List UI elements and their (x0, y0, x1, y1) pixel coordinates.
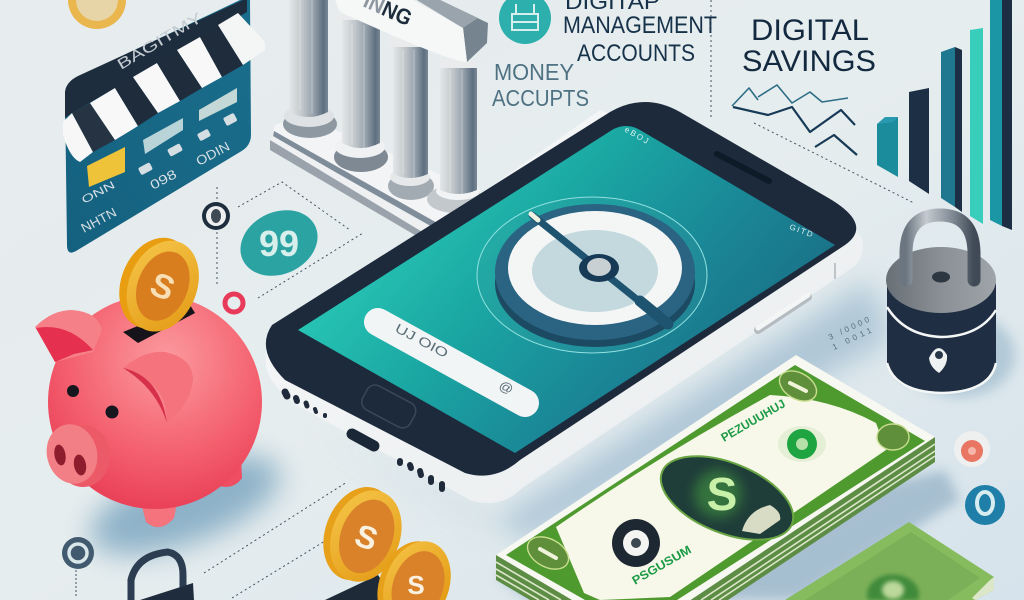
pig tail ring (225, 294, 243, 312)
column 2 (334, 8, 388, 172)
screen pill field: @ (497, 377, 516, 397)
pig snout (40, 419, 110, 489)
phone face (266, 102, 856, 476)
bill portrait oval: S (707, 468, 737, 520)
padlock top (886, 247, 996, 313)
padlock keyhole (929, 348, 947, 373)
coin: lower right: S (407, 570, 425, 600)
phone screen (298, 126, 835, 453)
card details: ONN (80, 179, 117, 207)
icon: coral dot (954, 431, 990, 467)
phone (266, 102, 863, 503)
badge: ring marker (202, 202, 230, 230)
screen status labels: eBOJ (623, 125, 650, 146)
bill serial texts: PSGUSUM (630, 542, 694, 588)
icon: management circle (499, 0, 551, 44)
card awning stripes (63, 13, 265, 162)
padlock body (887, 248, 996, 393)
padlock shackle (906, 215, 974, 280)
bill serial texts: PEZUUUHUJ (718, 396, 788, 445)
badge: 99: 99 (259, 223, 299, 264)
line chart (732, 85, 857, 155)
heading: digital management accounts: MANAGEMENT (563, 12, 717, 39)
pig left ear (35, 310, 102, 362)
bill serial texts (630, 396, 788, 588)
coin entering slot: S (145, 265, 180, 309)
bar chart (877, 0, 1012, 230)
card details (78, 88, 238, 236)
pig body (48, 295, 262, 509)
pig right ear (123, 352, 193, 423)
heading: digital savings: SAVINGS (742, 45, 876, 78)
phone home button (359, 382, 419, 431)
coin slot (123, 305, 195, 343)
pig shadow (78, 435, 292, 575)
pig legs (139, 458, 242, 527)
bill shadow (496, 470, 960, 600)
card dark band (65, 0, 247, 118)
screen status labels: GITD (788, 222, 814, 239)
dial widget (477, 197, 707, 353)
heading: money accupts: MONEY (494, 59, 574, 85)
small notes near padlock: 3 /0000 (827, 315, 871, 342)
small notes near padlock: 1 0011 (831, 326, 873, 352)
coin: lower right (377, 541, 451, 600)
bill green seal (778, 426, 826, 462)
coin: lower left: S (350, 517, 383, 558)
bar 1 (877, 117, 898, 177)
lower padlock (131, 552, 194, 600)
piggy bank (35, 227, 292, 575)
card details: 098 (147, 166, 179, 193)
card title: BAGITMY (114, 9, 205, 73)
phone earpiece (717, 154, 769, 181)
screen pill field (378, 320, 525, 403)
heading: digital savings: DIGITAL (751, 14, 869, 47)
padlock bands (887, 307, 996, 393)
bank roof (335, 0, 488, 62)
coin: lower left (311, 477, 414, 593)
stack edges (496, 437, 935, 600)
bar 2 (909, 88, 929, 194)
phone side (266, 110, 863, 503)
small notes near padlock (827, 315, 873, 352)
screen pill field: UJ OIO (393, 320, 451, 361)
column 4 (427, 57, 483, 213)
second bill (785, 522, 994, 600)
column 1 (283, 0, 337, 138)
bar 3 (941, 47, 962, 212)
icon: top coin (68, 0, 126, 29)
speaker dots (285, 392, 442, 489)
badge: small ring (62, 537, 94, 598)
heading: money accupts: ACCUPTS (492, 85, 589, 111)
dollar bill stack (496, 355, 960, 600)
bar 5 (990, 0, 1012, 230)
coin entering slot (106, 227, 212, 342)
pig eyes (67, 385, 118, 418)
badge: 99 (230, 198, 328, 288)
bank plinth (270, 115, 500, 238)
shadow under phone (300, 280, 890, 540)
dial needle (531, 214, 668, 324)
bill black seal (612, 519, 660, 567)
column 3 (388, 32, 434, 200)
heading: digital management accounts (563, 0, 717, 67)
padlock (886, 215, 1015, 397)
bill portrait oval (649, 439, 805, 557)
phone side button (758, 263, 835, 330)
heading: digital management accounts: ACCOUNTS (577, 40, 695, 67)
bar 4 (970, 28, 983, 224)
bill corner ornaments (522, 365, 909, 576)
heading: money accupts (492, 59, 589, 111)
card details: NHTN (78, 205, 119, 236)
bill green border (506, 365, 925, 600)
heading: digital savings (742, 14, 876, 78)
bill cream center (556, 395, 886, 600)
panel: credit card (63, 0, 265, 253)
dial knob (579, 254, 619, 282)
bank building (270, 0, 500, 238)
card details: ODIN (193, 139, 232, 169)
phone port (352, 434, 374, 446)
card chip (87, 147, 125, 187)
bill top (496, 355, 935, 600)
dark wedge under coins (325, 575, 395, 600)
screen status labels (623, 125, 814, 239)
icon: blue dot (965, 485, 1005, 525)
